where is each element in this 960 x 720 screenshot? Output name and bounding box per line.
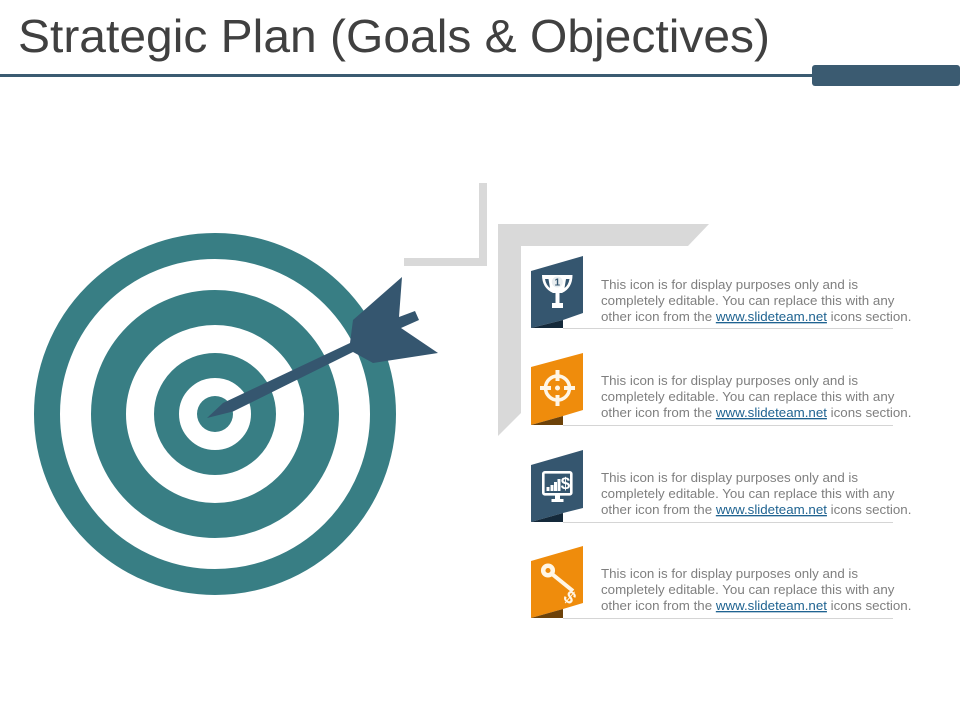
icon: monitor with chart: $ [561,474,571,493]
item 1: completely editable. You can replace this with any [601,293,895,308]
text block: This icon is for display purposes only and is [601,566,858,581]
item 2: other icon from the www.slideteam.net icons section. [601,405,911,420]
item 4: other icon from the www.slideteam.net icons section. [601,598,911,613]
icon: key with dollar: $ [560,587,580,608]
arrow [207,277,438,418]
text block: This icon is for display purposes only and is [601,277,858,292]
banner: blue [531,450,583,522]
icon: trophy [542,275,572,308]
text block: This icon is for display purposes only and is [601,470,858,485]
item 3: completely editable. You can replace this with any [601,486,895,501]
item 4 [531,546,911,619]
icon: monitor with chart [543,472,571,502]
item 3: other icon from the www.slideteam.net icons section. [601,502,911,517]
item 2: completely editable. You can replace this with any [601,389,895,404]
large grey corner [498,224,709,436]
icon: crosshair [540,370,575,406]
banner: orange [531,546,583,618]
icon: trophy: 1 [555,278,561,288]
item 4: completely editable. You can replace this with any [601,582,895,597]
banner: orange [531,353,583,425]
item 2 [531,353,911,426]
title: Strategic Plan (Goals & Objectives) [18,10,770,62]
item 1 [531,256,911,329]
target [47,246,383,582]
header rule and bar [0,65,960,86]
icon: key with dollar [543,566,580,608]
small grey corner [404,183,487,266]
banner: blue [531,256,583,328]
item 1: other icon from the www.slideteam.net icons section. [601,309,911,324]
item 3 [531,450,911,523]
text block: This icon is for display purposes only and is [601,373,858,388]
